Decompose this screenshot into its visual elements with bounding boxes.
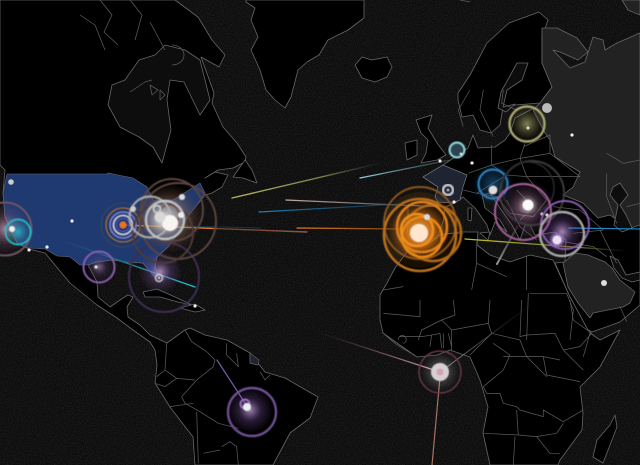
Newfoundland	[233, 160, 257, 183]
trail: yellow	[465, 239, 628, 251]
Madagascar	[593, 415, 617, 463]
Cuba	[143, 289, 192, 305]
France (highlight)	[423, 165, 467, 203]
attack marker: Netherlands	[450, 142, 464, 158]
Iceland	[355, 57, 392, 82]
United States (blue)	[3, 173, 205, 276]
attack marker: US centre	[101, 203, 145, 247]
attack marker: Turkey and Syria	[538, 201, 589, 256]
trail: dark blue	[140, 225, 260, 228]
trail: pink	[286, 200, 420, 206]
Hispaniola	[180, 304, 205, 312]
trail: olive	[232, 162, 385, 198]
Scandinavia	[458, 12, 552, 133]
attack marker: US west coast	[0, 202, 32, 256]
French Guiana	[250, 353, 259, 365]
attack marker: Texas	[84, 252, 114, 282]
trail: blue	[259, 204, 400, 212]
trail: orange	[297, 228, 400, 229]
attack marker: Florida and Caribbean	[129, 242, 199, 312]
trail: pink to Gulf of Guinea	[317, 332, 437, 371]
attack marker: Baltic	[510, 106, 544, 142]
trail: salmon	[432, 377, 440, 465]
attack marker: Balkans	[495, 161, 564, 240]
trail: grey from Gulf of Guinea	[447, 300, 537, 367]
trail: purple in Brazil	[217, 360, 245, 403]
attack trails	[55, 160, 640, 465]
Greenland	[246, 0, 364, 108]
Novaya Zemlya	[622, 0, 640, 15]
attack marker: Italy	[471, 162, 515, 206]
small white location dots	[8, 103, 607, 308]
Americas	[0, 0, 318, 465]
trail: teal	[55, 238, 195, 287]
trail: light blue	[360, 160, 450, 178]
Ireland	[405, 140, 417, 160]
Hudson Bay	[108, 45, 210, 163]
trail: blue east	[569, 228, 640, 229]
trail: orange from US	[123, 225, 307, 232]
Russia and neighbours (grey)	[533, 0, 640, 318]
Eurasia	[405, 105, 640, 332]
Caspian Sea	[610, 183, 632, 232]
attack marker: France	[443, 185, 453, 195]
Africa	[380, 232, 620, 465]
attack marker: Spain and Morocco	[382, 187, 461, 271]
trail: grey	[497, 227, 517, 264]
Gulf of Bothnia	[498, 63, 528, 112]
attack marker: US east coast	[130, 179, 216, 263]
Saudi Arabia	[563, 253, 635, 318]
Arctic islands	[80, 0, 470, 100]
attack marker: Gulf of Guinea	[419, 351, 461, 393]
Great Britain	[416, 115, 446, 163]
Persian Gulf	[610, 256, 640, 282]
attack marker: Brazil	[227, 387, 276, 436]
Sicily and Sardinia	[468, 208, 490, 240]
